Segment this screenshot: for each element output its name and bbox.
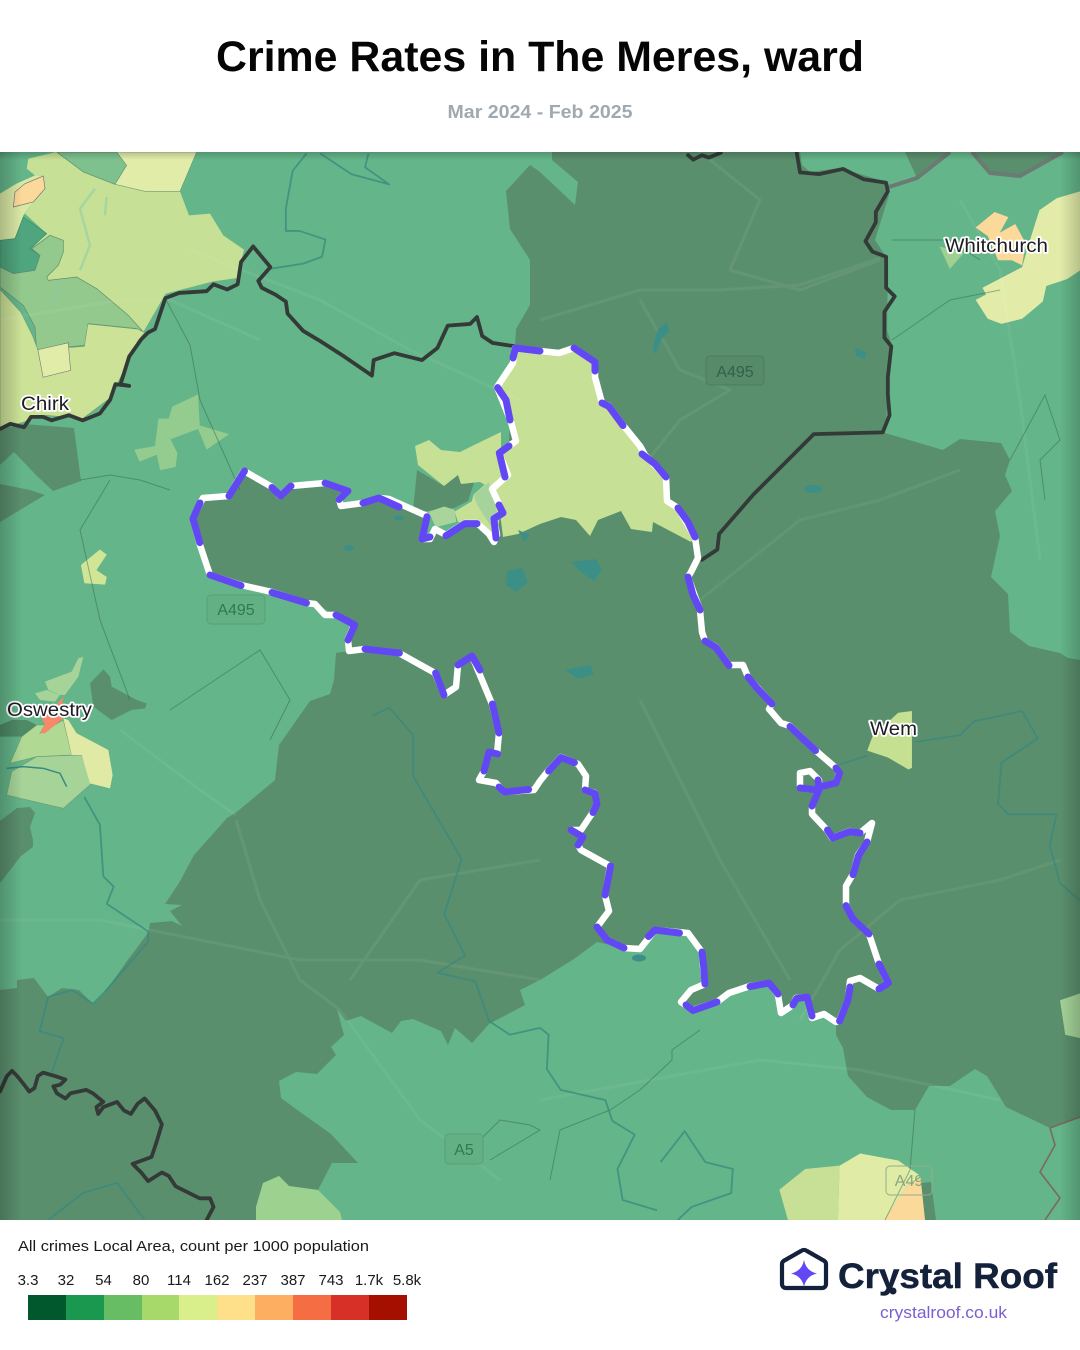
legend scale values: 237 [242, 1272, 268, 1289]
legend scale values: 3.3 [18, 1272, 38, 1289]
place label: Whitchurch: Whitchurch [945, 236, 1048, 257]
legend scale values: 162 [204, 1272, 230, 1289]
yellow patch west of ward [415, 432, 502, 486]
legend scale values: 1.7k [355, 1272, 384, 1289]
legend scale values: 743 [318, 1272, 344, 1289]
title: Crime Rates in The Meres, ward [216, 33, 864, 81]
Oswestry cluster [0, 657, 147, 808]
road shield: A495 north [706, 356, 764, 385]
map edge vignette [0, 152, 1080, 1220]
small dark patches [0, 152, 1063, 1220]
road shield: A5: A5 [454, 1142, 474, 1159]
road shield: A5 [445, 1134, 483, 1164]
place label: Chirk: Chirk [21, 394, 70, 415]
road shield: A495 west: A495 [217, 602, 255, 619]
ward yellow area [492, 348, 695, 542]
ward boundary: white line [193, 348, 888, 1022]
lakes [344, 322, 866, 962]
icon: house with star [782, 1250, 826, 1288]
Whitchurch cluster [940, 191, 1080, 324]
legend scale values: 54 [95, 1272, 112, 1289]
wordmark key detail [890, 1288, 896, 1294]
road shield: A495 north: A495 [716, 364, 754, 381]
legend scale values [18, 1272, 422, 1289]
legend scale values: 114 [167, 1272, 191, 1289]
rivers [270, 153, 389, 269]
legend scale values: 5.8k [393, 1272, 422, 1289]
county borders [0, 246, 515, 429]
roads [0, 152, 1060, 1180]
legend [18, 1238, 422, 1320]
road shield: A49: A49 [895, 1173, 923, 1190]
subtitle: date range: Mar 2024 - Feb 2025 [448, 101, 632, 122]
legend title: All crimes Local Area, count per 1000 population [18, 1238, 369, 1255]
legend scale values: 387 [280, 1272, 306, 1289]
north-west yellow areas [0, 152, 244, 351]
legend colour swatches [28, 1295, 407, 1320]
legend scale values: 32 [58, 1272, 74, 1289]
place label: Oswestry: Oswestry [7, 700, 93, 721]
wordmark: Crystal Roof [838, 1257, 1057, 1296]
south light area [256, 1176, 342, 1220]
place label: Wem: Wem [870, 719, 917, 740]
choropleth map [0, 152, 1080, 1220]
road shield: A49 [886, 1166, 932, 1195]
road shield: A495 west [207, 595, 265, 624]
Wem, south towns [779, 711, 1080, 1220]
logo: Crystal Roof [782, 1250, 1057, 1322]
website url: crystalroof.co.uk [880, 1304, 1008, 1322]
dark low-crime region [0, 152, 1080, 1220]
thin boundary lines [80, 240, 1060, 1220]
ward boundary: purple dashes [193, 348, 888, 1021]
legend scale values: 80 [133, 1272, 149, 1289]
